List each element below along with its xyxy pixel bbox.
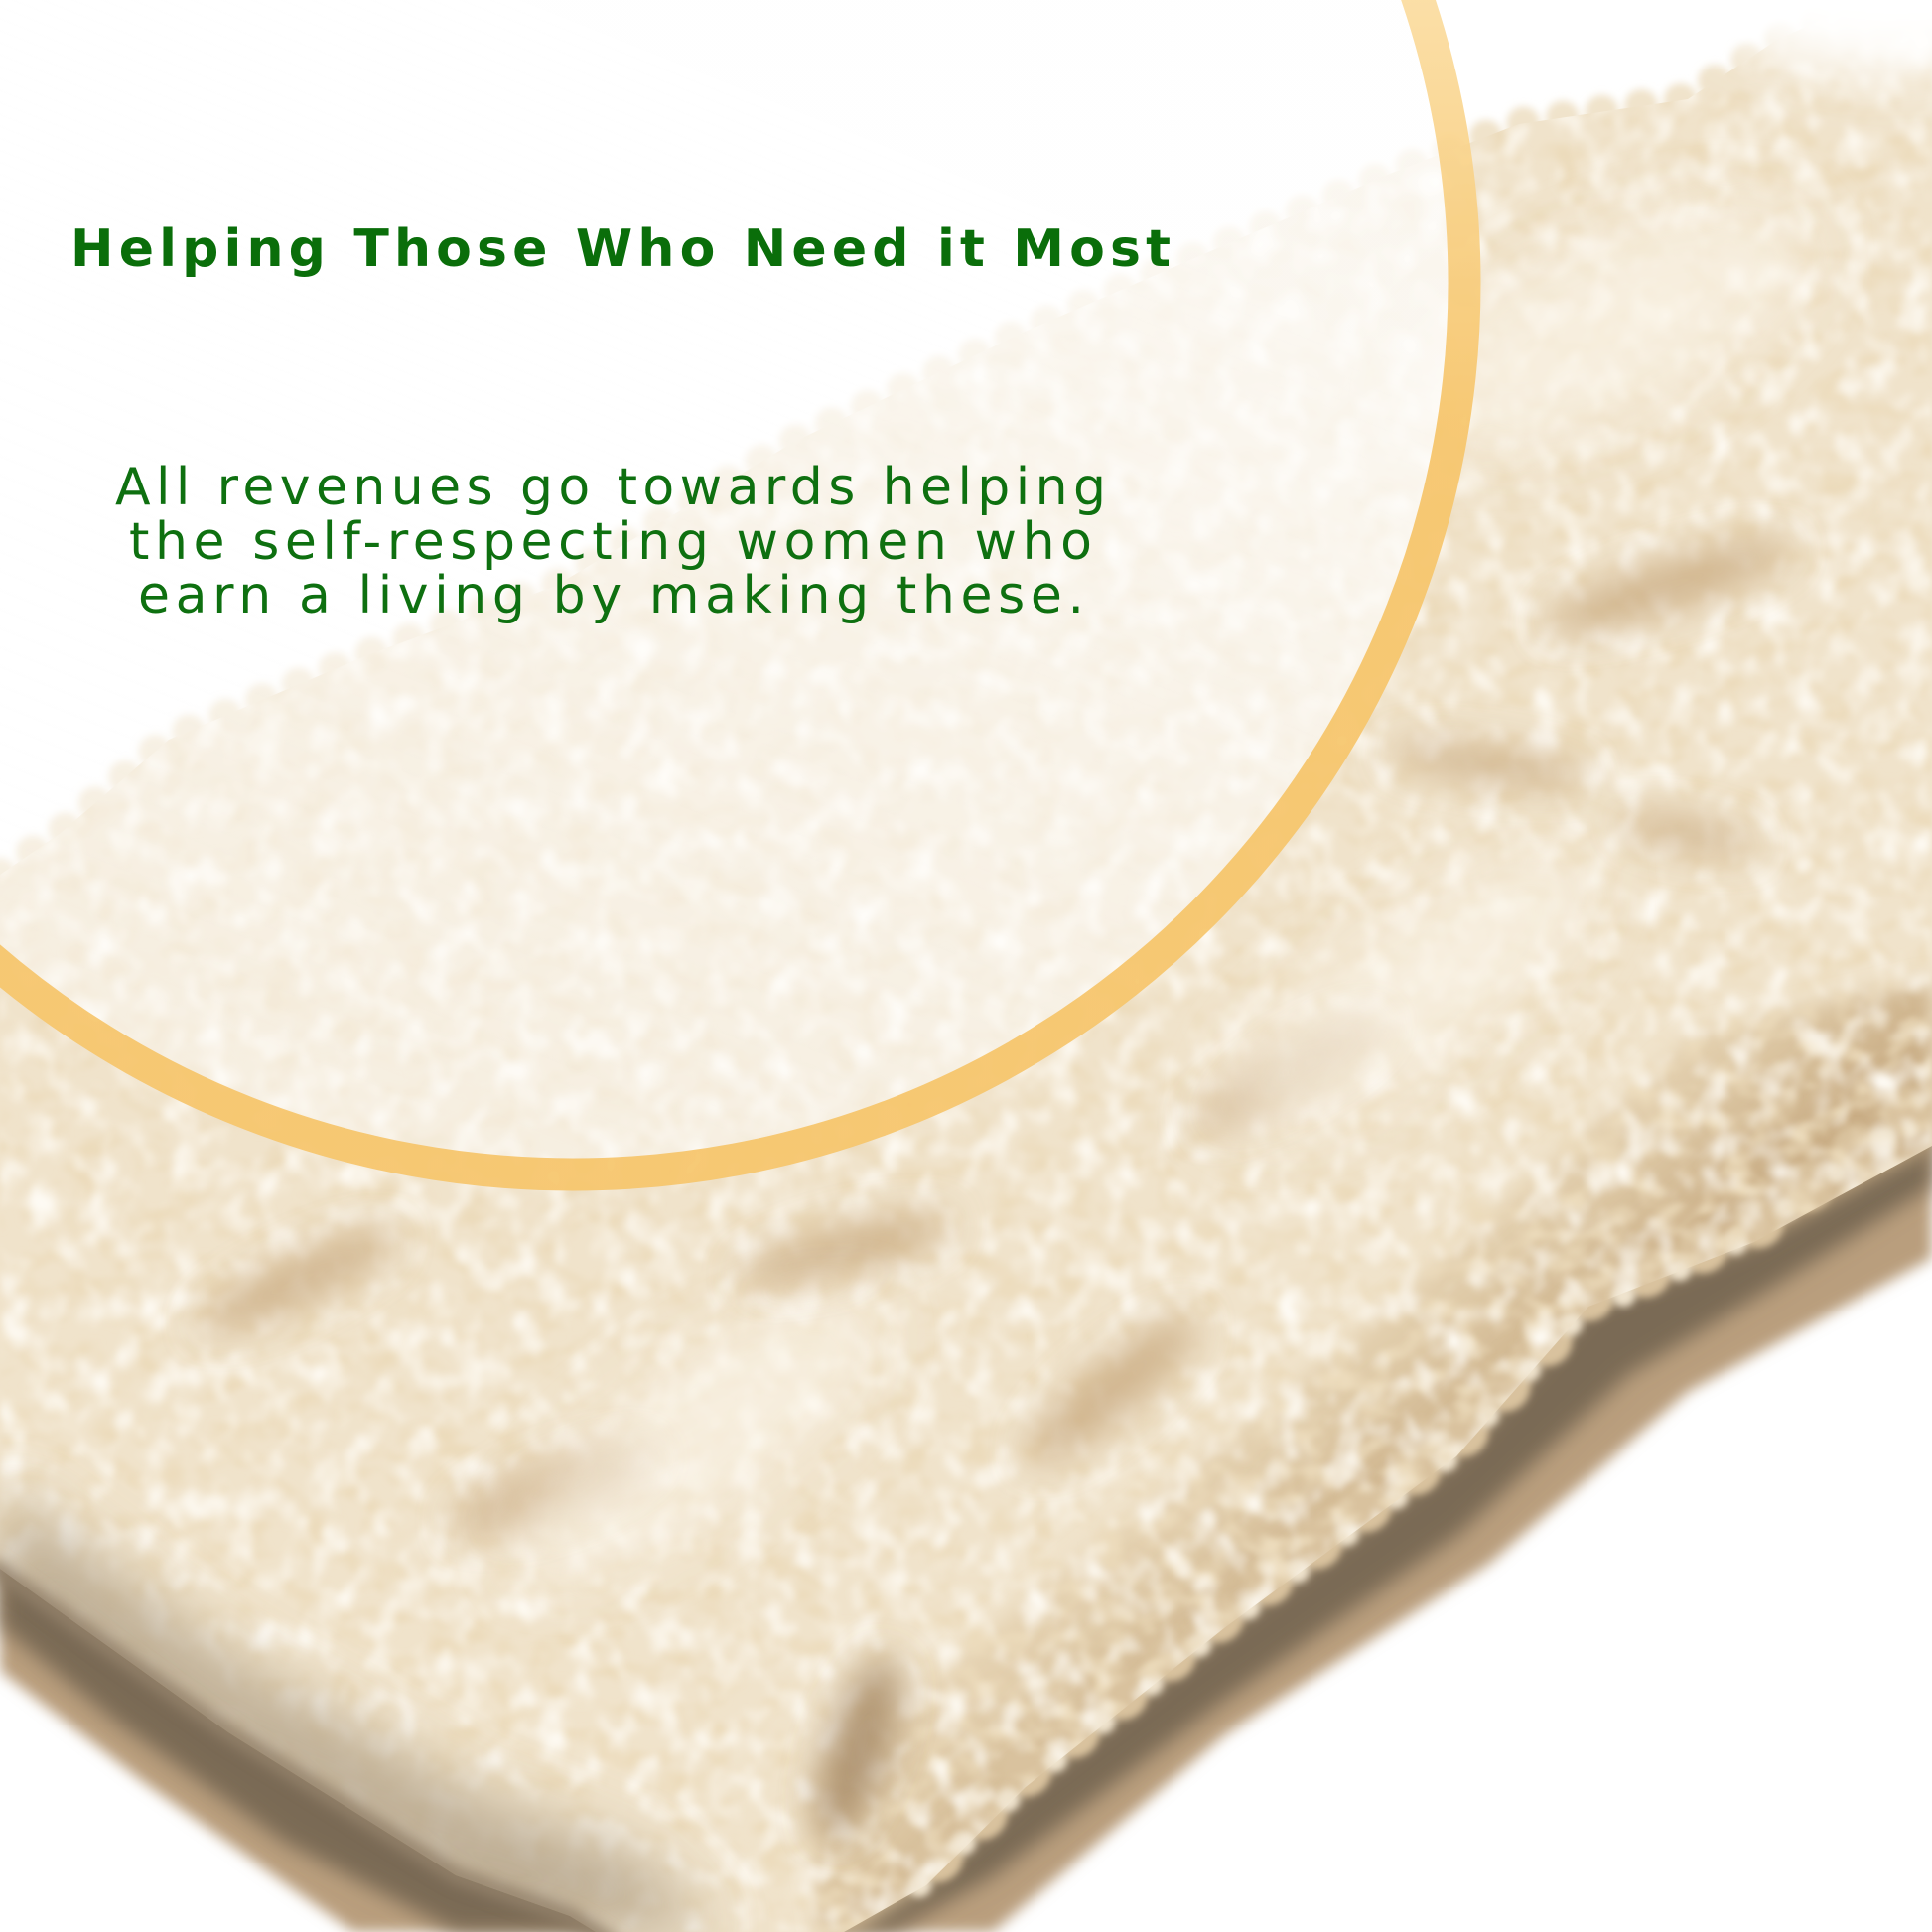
body text — [115, 458, 1106, 625]
heading: Helping Those Who Need it Most — [70, 219, 1171, 279]
greyish soft focus fall-off at the bottom-left edge — [0, 1489, 715, 1932]
soft highlights on the yarn — [477, 154, 1844, 1622]
body text: All revenues go towards helping — [115, 458, 1106, 517]
overexposed fade at top-right corner — [1688, 0, 1932, 74]
body text: earn a living by making these. — [138, 566, 1084, 625]
soft out-of-focus fabric edge at bottom-left — [0, 1564, 616, 1932]
shaded folds in the cable knit — [189, 523, 1798, 1555]
body text: the self-respecting women who — [129, 512, 1092, 572]
cast shadow under the band — [0, 993, 1932, 1932]
translucent white circle panel — [0, 0, 1449, 1159]
dark crease at the fold corner — [801, 1648, 916, 1847]
lower folded edge of the band — [801, 978, 1932, 1932]
golden ring outline — [0, 0, 1464, 1174]
